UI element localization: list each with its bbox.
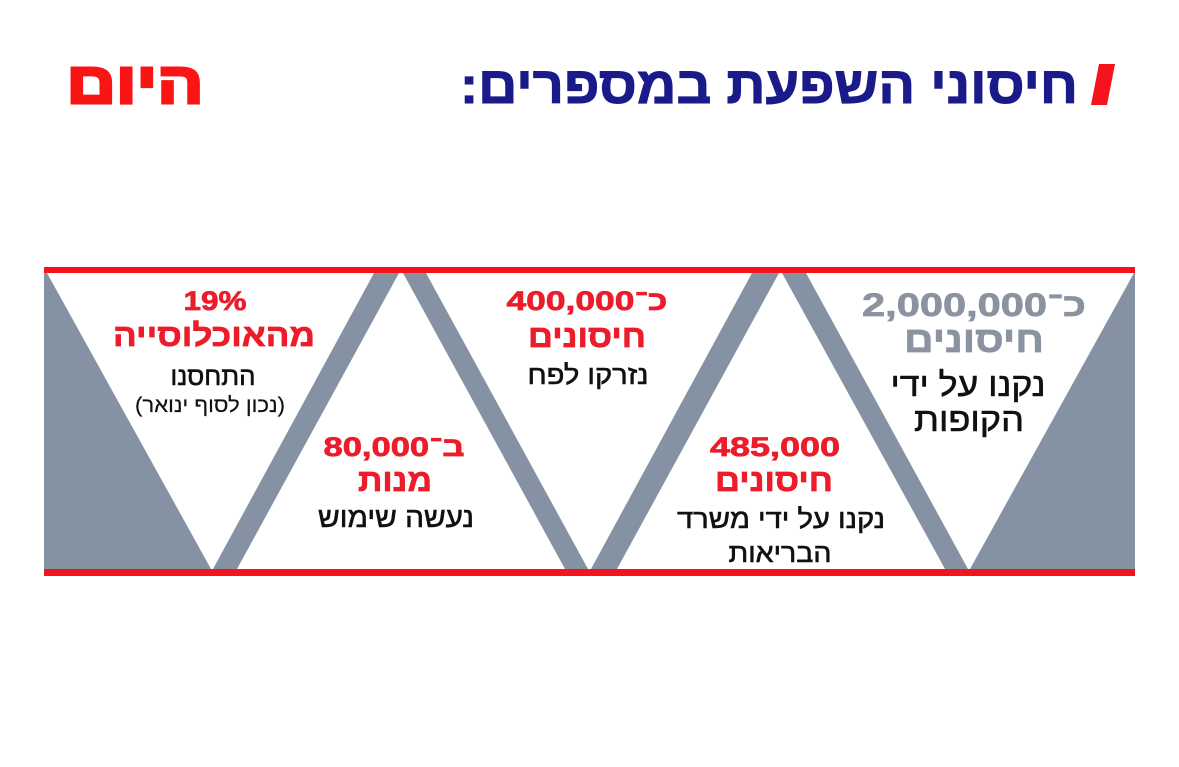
bottom red rule: [44, 569, 1135, 576]
stat: 19% of population: [113, 286, 315, 417]
stat: 485,000 vaccines: נקנו על ידי משרד: [677, 504, 885, 534]
stat: 2,000,000 vaccines: חיסונים: [904, 319, 1044, 360]
stat: 485,000 vaccines: הבריאות: [728, 538, 832, 568]
diagonal band 1: [213, 273, 399, 569]
left grey triangle: [44, 273, 211, 569]
stat: 19% of population: מהאוכלוסייה: [113, 318, 315, 353]
stat: 80,000 doses: [318, 432, 474, 533]
title: חיסוני השפעת במספרים:: [460, 57, 1078, 115]
stat: 80,000 doses: ב־80,000: [323, 432, 464, 462]
stat: 2,000,000 vaccines: הקופות: [914, 401, 1024, 438]
stat: 80,000 doses: נעשה שימוש: [318, 502, 474, 533]
stat: 2,000,000 vaccines: כ־2,000,000: [862, 287, 1086, 323]
stat: 400,000 vaccines: חיסונים: [528, 319, 646, 354]
stat: 400,000 vaccines: נזרקו לפח: [528, 360, 648, 390]
stat: 19% of population: 19%: [184, 286, 246, 316]
stat: 485,000 vaccines: חיסונים: [715, 463, 833, 498]
right grey triangle: [970, 273, 1135, 569]
stat: 485,000 vaccines: [677, 432, 885, 568]
stat: 19% of population: (נכון לסוף ינואר): [135, 394, 285, 417]
icon: red slash accent: [1091, 64, 1115, 105]
stat: 400,000 vaccines: כ־400,000: [506, 286, 668, 316]
diagonal band 2: [403, 273, 588, 569]
top red rule: [44, 267, 1135, 273]
diagonal band 3: [591, 273, 779, 569]
diagonal band 4: [782, 273, 968, 569]
stat: 19% of population: התחסנו: [170, 361, 256, 391]
logo: Israel Hayom: היום: [66, 51, 204, 116]
stat: 400,000 vaccines: [506, 286, 668, 390]
stat: 485,000 vaccines: 485,000: [710, 432, 840, 462]
stat: 2,000,000 vaccines: [862, 287, 1086, 438]
stat: 2,000,000 vaccines: נקנו על ידי: [890, 366, 1046, 403]
stat: 80,000 doses: מנות: [358, 463, 432, 498]
panel: zigzag strip: [44, 267, 1135, 576]
